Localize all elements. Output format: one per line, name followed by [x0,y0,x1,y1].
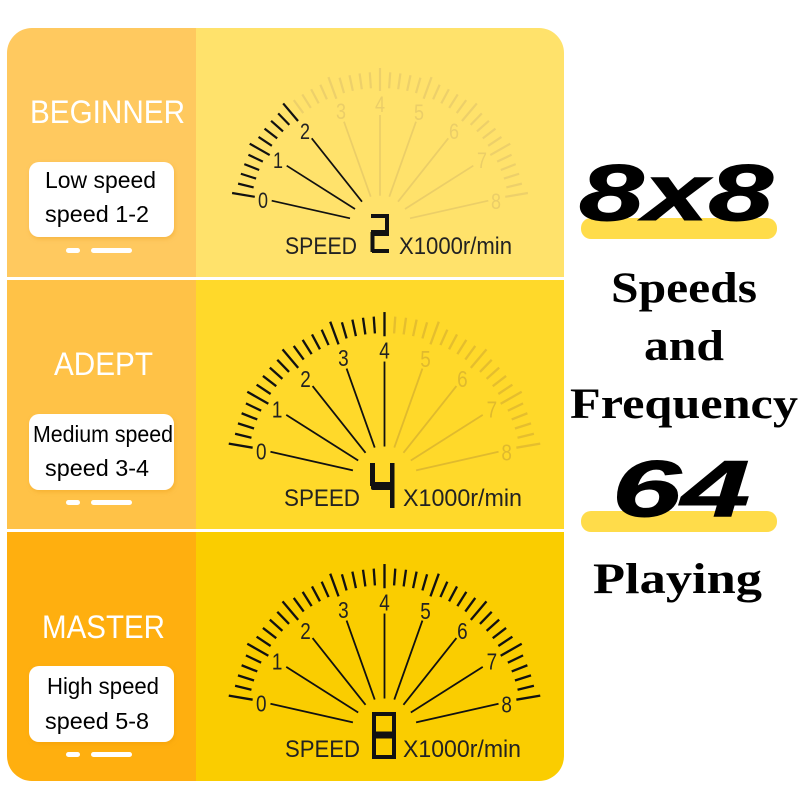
scale numbers: 7 [477,148,487,173]
title: 64: 64 [612,444,750,533]
scale numbers: 5 [420,346,431,372]
callout: low speed: Low speed [45,167,156,193]
scale numbers: 7 [487,396,497,422]
callout: high speed: speed 5-8 [45,708,149,734]
panel: adept [7,280,564,529]
speed readout: adept [284,463,522,512]
spokes [270,614,499,722]
scale numbers: 8 [501,440,512,466]
panel: beginner [7,28,564,277]
scale numbers: 2 [300,119,310,144]
speed readout: master [285,714,521,763]
scale numbers: 0 [256,690,267,716]
callout: medium speed: speed 3-4 [45,455,149,481]
pills: beginner [66,248,132,253]
scale numbers: 6 [457,618,468,644]
speed readout: beginner: X1000r/min [399,233,512,260]
inactive ticks [294,68,528,197]
active spokes [272,138,362,218]
speed readout: adept: X1000r/min [403,485,522,512]
scale numbers: 6 [457,366,468,392]
scale numbers [256,337,512,466]
heading: adept: ADEPT [54,346,153,382]
speed readout: beginner: SPEED [285,233,357,260]
callout: low speed [29,162,174,237]
scale numbers: 4 [379,589,390,615]
panel: master [7,532,564,781]
scale numbers: 3 [336,99,346,124]
text: frequency: Frequency [570,381,799,428]
scale numbers: 1 [273,148,283,173]
active ticks [229,312,384,448]
scale numbers: 3 [338,345,349,371]
scale numbers: 1 [272,648,282,674]
scale numbers: 0 [256,438,267,464]
scale numbers: 4 [379,337,390,363]
scale numbers: 3 [338,597,349,623]
callout: medium speed: Medium speed [33,421,173,447]
text: and: and [644,323,724,370]
callout: medium speed [29,414,174,490]
heading: beginner: BEGINNER [30,94,185,130]
inactive spokes [394,369,499,470]
gauge: adept [229,312,540,470]
scale numbers: 8 [491,189,501,214]
title: 8x8: 8x8 [579,148,774,237]
scale numbers: 5 [414,100,424,125]
highlight bar: 8x8 [581,218,777,239]
pills: master [66,752,132,757]
text: speeds: Speeds [611,265,757,312]
inactive ticks [394,317,540,448]
scale numbers: 2 [300,366,311,392]
callout: high speed: High speed [47,673,159,699]
scale numbers: 8 [501,692,512,718]
scale numbers [256,589,512,718]
ticks [229,564,540,700]
scale numbers: 2 [300,618,311,644]
active spokes [270,362,384,470]
scale numbers [258,92,501,214]
gauge: master [229,564,540,722]
text: playing: Playing [593,556,763,603]
scale numbers: 0 [258,188,268,213]
gauge: beginner [232,68,528,218]
speed readout: master: X1000r/min [403,736,521,763]
callout: low speed: speed 1-2 [45,201,149,227]
inactive spokes [344,115,488,218]
scale numbers: 5 [420,598,431,624]
callout: high speed [29,666,174,742]
card: speed levels [7,28,564,781]
speed readout: beginner [285,214,512,260]
speed readout: adept: SPEED [284,485,360,512]
scale numbers: 7 [487,648,497,674]
scale numbers: 4 [375,92,385,117]
speed readout: master: SPEED [285,736,360,763]
pills: adept [66,500,132,505]
scale numbers: 1 [272,396,282,422]
scale numbers: 6 [449,119,459,144]
heading: master: MASTER [42,609,165,645]
highlight bar: 64 [581,511,777,532]
active ticks [232,103,298,197]
